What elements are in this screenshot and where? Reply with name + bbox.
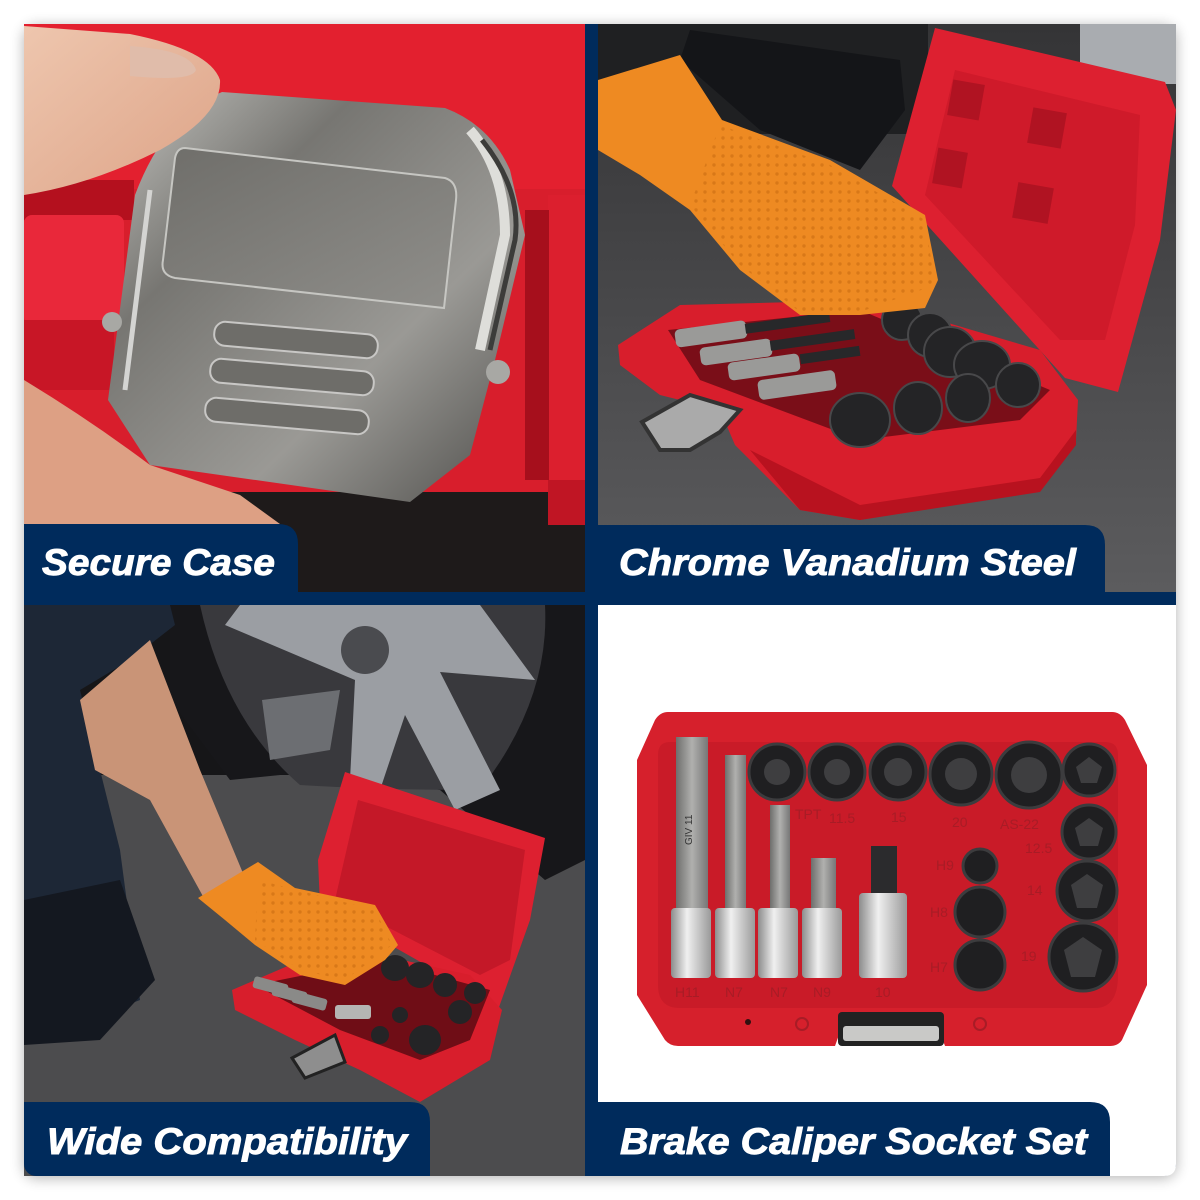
case moulded labels: 14 — [1027, 882, 1043, 898]
case moulded labels: H7 — [930, 959, 948, 975]
case moulded labels: H8 — [930, 904, 948, 920]
icon: kneeling person — [24, 605, 175, 1045]
case moulded labels: 19 — [1021, 948, 1037, 964]
caption: chrome vanadium steel — [586, 525, 1105, 592]
caption: wide compatibility — [24, 1102, 430, 1176]
panel: brake caliper socket set — [598, 605, 1176, 1176]
caption: brake caliper socket set: Brake Caliper Socket Set — [620, 1121, 1089, 1162]
caption: secure case — [24, 524, 298, 592]
hex bit sockets — [671, 737, 907, 978]
case moulded labels: 11.5 — [829, 810, 855, 826]
case moulded labels: N7 — [770, 984, 788, 1000]
case moulded labels: 10 — [875, 984, 891, 1000]
latch — [838, 1012, 944, 1046]
case moulded labels: 20 — [952, 814, 968, 830]
icon: arm — [80, 640, 250, 900]
case moulded labels: AS-22 — [1000, 816, 1039, 832]
case moulded labels: TPT — [795, 806, 822, 822]
panel: secure case — [24, 24, 585, 592]
caption: wide compatibility: Wide Compatibility — [47, 1121, 410, 1162]
icon: finger — [24, 380, 280, 524]
black impact sockets — [749, 742, 1117, 991]
icon: sockets and bits — [674, 300, 1040, 447]
icon: chrome latch — [102, 92, 525, 502]
caption: secure case: Secure Case — [42, 542, 275, 583]
panel: wide compatibility — [24, 605, 585, 1176]
icon: case latch — [292, 1035, 345, 1078]
icon: orange glove — [198, 862, 398, 985]
case — [637, 712, 1147, 1046]
hex bit sockets: GIV 11 — [684, 814, 695, 845]
caption: chrome vanadium steel: Chrome Vanadium Steel — [619, 542, 1077, 583]
panel: chrome vanadium steel — [598, 24, 1176, 592]
icon: orange glove — [598, 55, 938, 315]
icon: case tray with sockets — [232, 955, 502, 1102]
case moulded labels — [675, 806, 1052, 1000]
case moulded labels: N7 — [725, 984, 743, 1000]
icon: open case lid — [892, 28, 1176, 392]
case moulded labels: 15 — [891, 809, 907, 825]
case moulded labels: N9 — [813, 984, 831, 1000]
case moulded labels: H11 — [675, 984, 700, 1000]
icon: thumb — [24, 26, 220, 195]
case moulded labels: H9 — [936, 857, 954, 873]
icon: tyre and wheel — [170, 605, 585, 880]
case moulded labels: 12.5 — [1025, 840, 1052, 856]
icon: open case lid — [318, 772, 545, 1010]
caption: brake caliper socket set — [586, 1102, 1110, 1176]
icon: case latch — [642, 395, 740, 450]
icon: case tray — [618, 300, 1078, 520]
